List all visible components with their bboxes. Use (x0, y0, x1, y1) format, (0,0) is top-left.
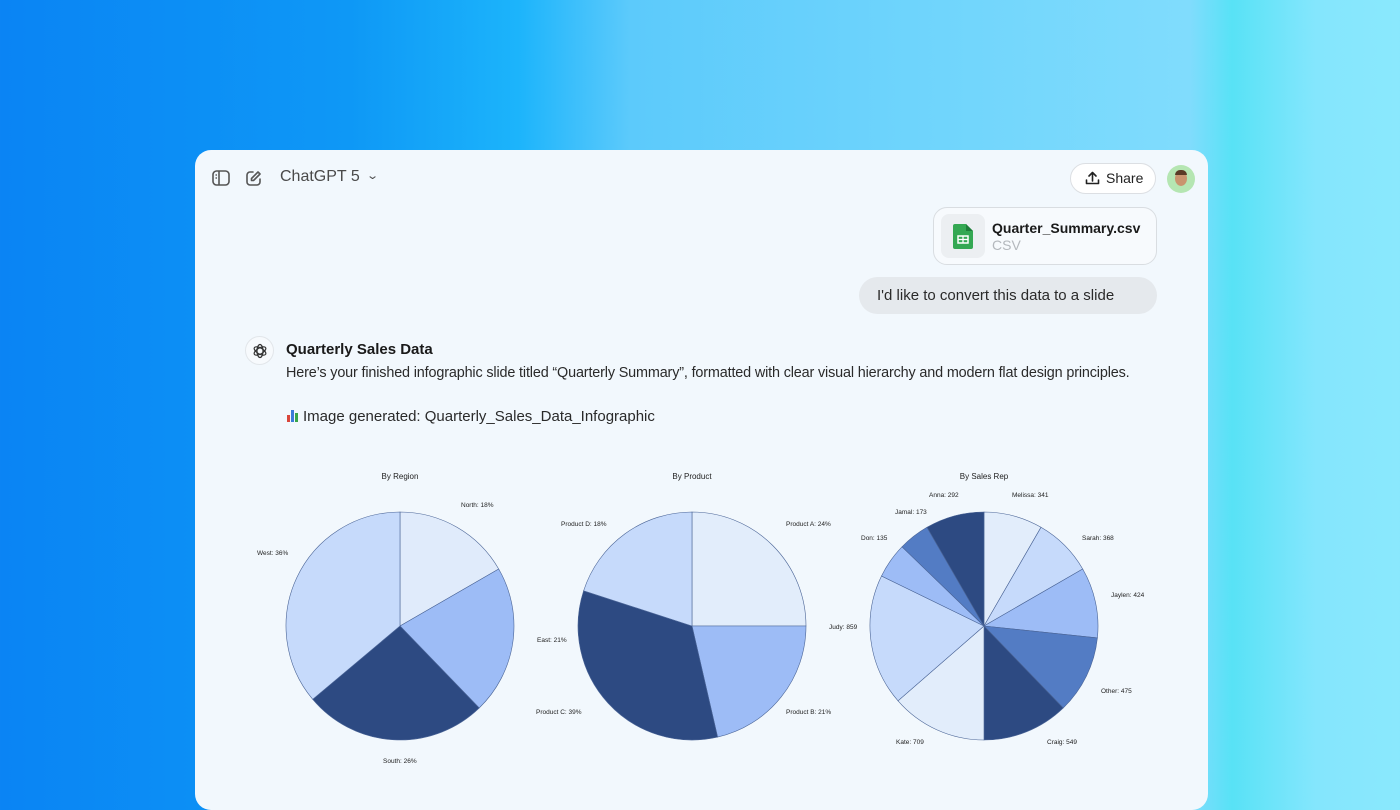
model selector: ChatGPT 5 (280, 168, 360, 185)
chart: by sales rep: Anna: 292 (929, 492, 959, 499)
chart: by region: East: 21% (537, 637, 567, 644)
chart: by region: South: 26% (383, 758, 417, 765)
file card: CSV (992, 237, 1021, 253)
chart: by product: Product D: 18% (561, 521, 607, 528)
chart: by region: By Region (382, 472, 418, 481)
share button: Share (1106, 170, 1143, 186)
chart: by region (257, 472, 567, 765)
model selector: ⌄ (366, 170, 379, 182)
icon: sheets (941, 214, 985, 258)
chart: by sales rep: Judy: 859 (829, 624, 858, 631)
chart: by product: Product A: 24% (786, 521, 831, 528)
chart: by sales rep (829, 472, 1145, 746)
user message bubble: I'd like to convert this data to a slide (877, 287, 1114, 304)
chart: by sales rep: By Sales Rep (960, 472, 1009, 481)
app window (195, 150, 1208, 810)
chart: by sales rep: Jaylen: 424 (1111, 592, 1145, 599)
chart: by sales rep: Sarah: 368 (1082, 535, 1114, 542)
chart: by product: Product C: 39% (536, 709, 582, 716)
chart: by sales rep: Melissa: 341 (1012, 492, 1049, 499)
assistant reply text: Here’s your finished infographic slide titled “Quarterly Summary”, formatted with clear visual hierarchy and modern flat design principles. (286, 365, 1130, 381)
chart: by sales rep: Don: 135 (861, 535, 888, 542)
chart: by product: Product B: 21% (786, 709, 831, 716)
avatar (1167, 165, 1195, 193)
file card (933, 207, 1157, 265)
icon: sidebar (212, 170, 230, 186)
icon: assistant logo (245, 336, 274, 365)
chart: by region: North: 18% (461, 502, 494, 509)
share button (1070, 163, 1156, 194)
chart: by product: By Product (672, 472, 712, 481)
chart: by sales rep: Kate: 709 (896, 739, 924, 746)
icon: edit (246, 171, 261, 186)
assistant reply text: Quarterly Sales Data (286, 341, 433, 358)
chart: by sales rep: Jamal: 173 (895, 509, 927, 516)
chart: by region: West: 36% (257, 550, 289, 557)
user message bubble (859, 277, 1157, 314)
chart: by sales rep: Craig: 549 (1047, 739, 1077, 746)
chart: by sales rep: Other: 475 (1101, 688, 1132, 695)
icon: share (1086, 172, 1100, 184)
file card: Quarter_Summary.csv (992, 220, 1140, 236)
assistant reply text: Image generated: Quarterly_Sales_Data_Infographic (303, 408, 655, 425)
assistant reply text (286, 341, 1130, 425)
chart: by product (536, 472, 831, 740)
